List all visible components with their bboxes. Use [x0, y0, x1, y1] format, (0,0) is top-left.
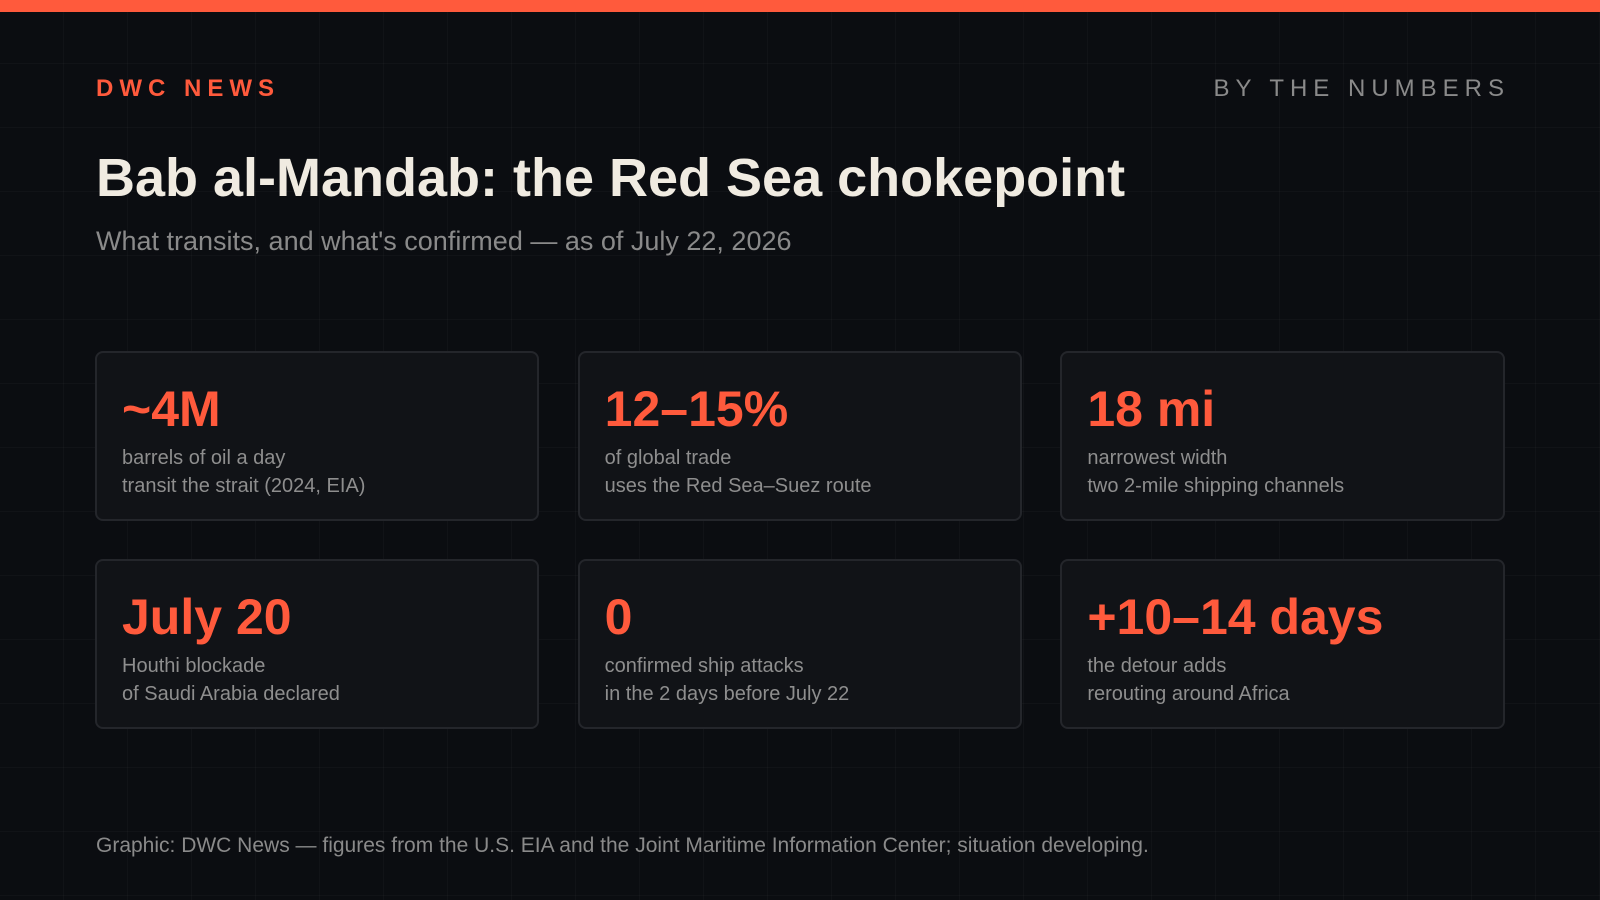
stat value: 18 mi	[1087, 381, 1215, 437]
panel: narrowest width	[1060, 351, 1505, 521]
stat description: of global trade	[605, 447, 731, 469]
stat description: two 2-mile shipping channels	[1087, 475, 1344, 497]
section label: BY THE NUMBERS	[1214, 75, 1510, 102]
stat description: barrels of oil a day	[122, 447, 285, 469]
stat description: the detour adds	[1087, 655, 1226, 677]
stat description: Houthi blockade	[122, 655, 265, 677]
stat description: in the 2 days before July 22	[605, 683, 849, 705]
stat description: narrowest width	[1087, 447, 1227, 469]
stat value: ~4M	[122, 381, 221, 437]
stat description: rerouting around Africa	[1087, 683, 1290, 705]
stat description	[122, 447, 365, 497]
stat description: of Saudi Arabia declared	[122, 683, 340, 705]
panel: global trade	[578, 351, 1022, 521]
stat description	[1087, 655, 1290, 705]
subtitle: What transits, and what's confirmed — as of July 22, 2026	[96, 226, 792, 256]
stat value: 0	[605, 589, 632, 645]
panel: barrels of oil	[95, 351, 539, 521]
stat value: +10–14 days	[1087, 589, 1383, 645]
stat value: July 20	[122, 589, 292, 645]
stat description: uses the Red Sea–Suez route	[605, 475, 872, 497]
panel: blockade date	[95, 559, 539, 729]
stat description: transit the strait (2024, EIA)	[122, 475, 365, 497]
stat description: confirmed ship attacks	[605, 655, 804, 677]
stat description	[1087, 447, 1344, 497]
top accent bar	[0, 0, 1600, 12]
stat value: 12–15%	[605, 381, 788, 437]
stat description	[605, 655, 849, 705]
panel: confirmed attacks	[578, 559, 1022, 729]
footer source note: Graphic: DWC News — figures from the U.S. EIA and the Joint Maritime Information Center; situation developing.	[96, 834, 1149, 857]
panel: detour	[1060, 559, 1505, 729]
title: Bab al-Mandab: the Red Sea chokepoint	[96, 148, 1125, 208]
stat description	[122, 655, 340, 705]
brand label: DWC NEWS	[96, 75, 280, 102]
stat description	[605, 447, 872, 497]
